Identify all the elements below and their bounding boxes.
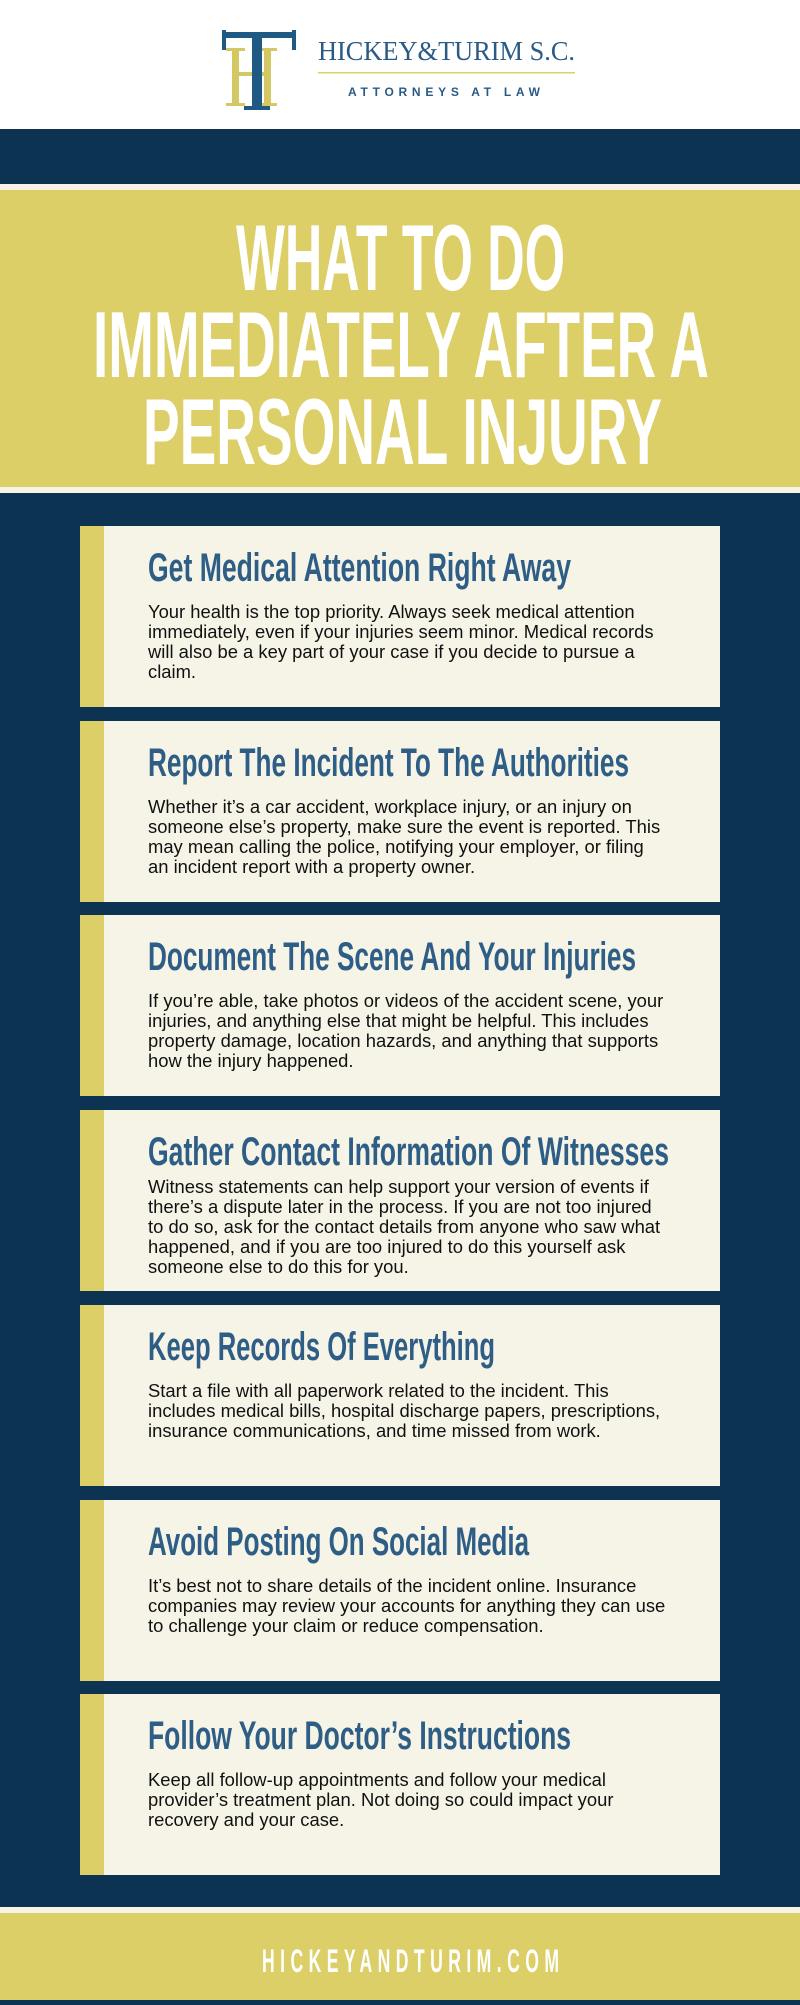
header: logo area bbox=[0, 0, 800, 129]
firm name: ATTORNEYS AT LAW bbox=[348, 85, 541, 99]
panel: step 6: Avoid Posting On Social Media bbox=[148, 1520, 529, 1564]
panel: step 3 bbox=[80, 915, 720, 1096]
title bbox=[93, 205, 709, 484]
panel: step 5: Start a file with all paperwork related to the incident. This includes medical bills, hospital discharge papers, prescriptions, insurance communications, and time missed from work. bbox=[148, 1380, 660, 1441]
panel: step 1: Your health is the top priority. Always seek medical attention immediately, even if your injuries seem minor. Medical records will also be a key part of your case if you decide to pursue a claim. bbox=[148, 601, 654, 682]
panel: step 2 bbox=[80, 721, 720, 902]
panel: step 7: Keep all follow-up appointments and follow your medical provider’s treatment plan. Not doing so could impact your recovery and your case. bbox=[148, 1769, 613, 1830]
panel: step 1 bbox=[80, 526, 720, 707]
icon: TH monogram bbox=[222, 30, 296, 110]
panel: step 4 bbox=[80, 1110, 720, 1291]
footer bbox=[0, 1907, 800, 2000]
panel: step 3: If you’re able, take photos or videos of the accident scene, your injuries, and anything else that might be helpful. This includes property damage, location hazards, and anything that supports how the injury happened. bbox=[148, 990, 663, 1071]
title banner bbox=[0, 184, 800, 493]
firm name bbox=[318, 36, 575, 99]
panel: step 6 bbox=[80, 1500, 720, 1681]
firm name: HICKEY&TURIM S.C. bbox=[318, 36, 575, 66]
panel: step 7 bbox=[80, 1694, 720, 1875]
panel: step 2: Whether it’s a car accident, workplace injury, or an injury on someone else’s property, make sure the event is reported. This may mean calling the police, notifying your employer, or filing an incident report with a property owner. bbox=[148, 796, 660, 877]
panel: step 6: It’s best not to share details of the incident online. Insurance companies may review your accounts for anything they can use to challenge your claim or reduce compensation. bbox=[148, 1575, 665, 1636]
panel: step 4: Witness statements can help support your version of events if there’s a dispute later in the process. If you are not too injured to do so, ask for the contact details from anyone who saw what happened, and if you are too injured to do this yourself ask someone else to do this for you. bbox=[148, 1176, 660, 1277]
footer: HICKEYANDTURIM.COM bbox=[262, 1945, 559, 1979]
panel: step 5 bbox=[80, 1305, 720, 1486]
panel: step 5: Keep Records Of Everything bbox=[148, 1325, 495, 1369]
